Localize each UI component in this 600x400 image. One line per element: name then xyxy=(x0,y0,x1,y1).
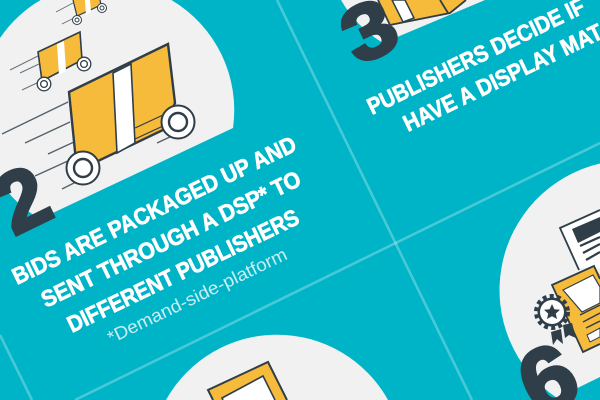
icon: yellow ad card xyxy=(552,266,600,352)
panel: step 3 publishers decide xyxy=(327,0,600,137)
icon: yellow frame xyxy=(208,362,287,400)
icon: award badge xyxy=(536,296,576,345)
icon: document xyxy=(560,210,600,270)
panel 3 background circle xyxy=(341,0,485,43)
icon: medium truck xyxy=(10,32,91,91)
icon: box xyxy=(378,0,466,25)
panel: step 5 circle and frame xyxy=(166,335,388,400)
panel: step 2 bids packaged xyxy=(0,0,305,348)
icon: small truck xyxy=(56,0,106,24)
heading: step 2 text: SENT THROUGH A DSP* TO xyxy=(37,166,305,313)
panel 6 background circle xyxy=(500,164,600,398)
footnote: *Demand-side-platform xyxy=(104,244,290,348)
panel 5 background circle xyxy=(166,335,388,400)
panel 2 background circle xyxy=(0,0,234,219)
heading: step 2 text: BIDS ARE PACKAGED UP AND xyxy=(8,131,300,290)
heading: step 2 text: DIFFERENT PUBLISHERS xyxy=(63,204,303,338)
panel: step 6 display ad and badge xyxy=(500,164,600,400)
icon: large truck xyxy=(2,44,194,189)
